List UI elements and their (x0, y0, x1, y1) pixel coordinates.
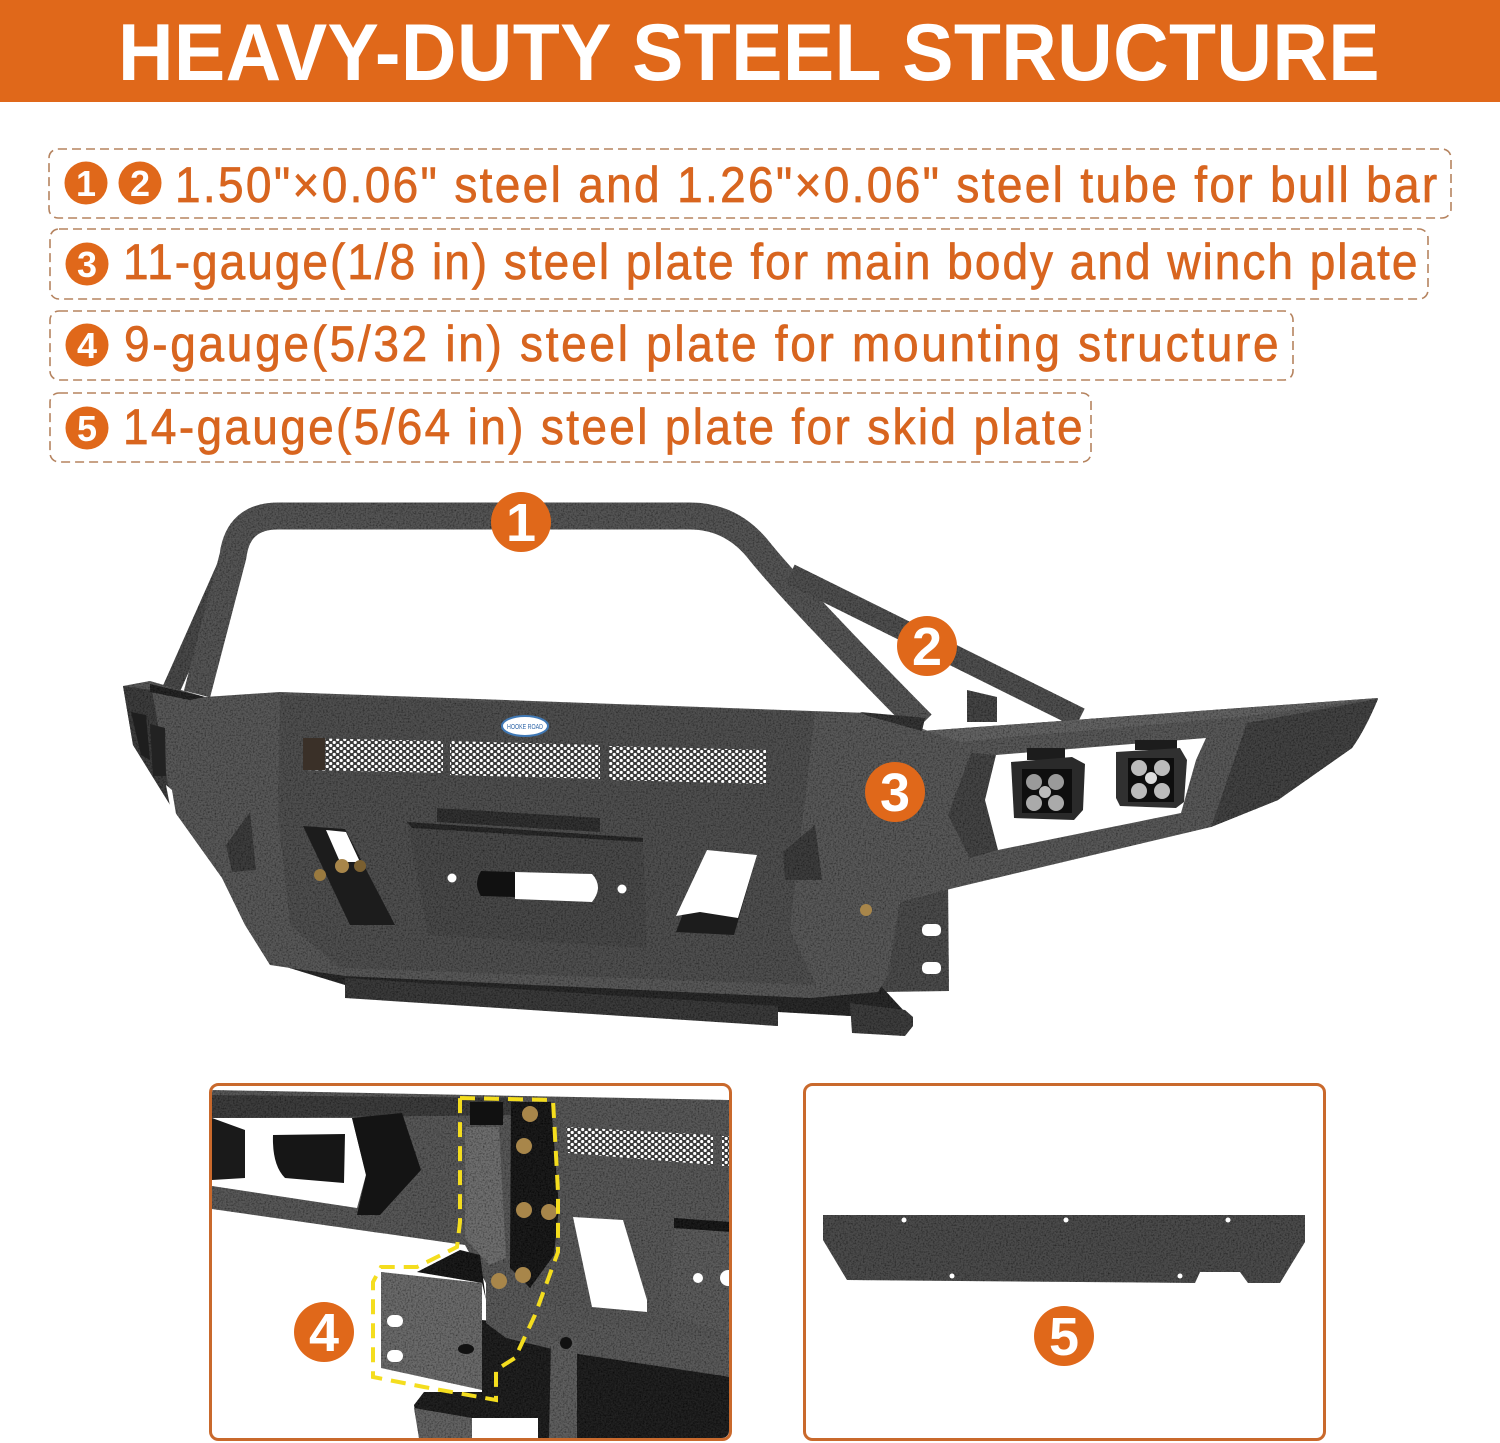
cross beam (486, 1320, 729, 1377)
left end panel (123, 686, 172, 808)
white window openings (212, 1118, 366, 1208)
bolts (491, 1106, 557, 1289)
vertical strut (549, 1348, 577, 1438)
callout 1: 1 (506, 493, 536, 553)
center panel (278, 695, 816, 985)
callout 4: 4 (309, 1303, 339, 1363)
wing end panel (1211, 699, 1378, 827)
title: HEAVY-DUTY STEEL STRUCTURE (118, 6, 1380, 97)
left tower openings (131, 712, 150, 760)
upper beam and body (212, 1090, 730, 1350)
yellow dashed highlight (373, 1098, 558, 1400)
LED light right (1116, 740, 1187, 808)
mounting tabs (967, 690, 997, 722)
left opening with bolts (303, 826, 395, 925)
black box (470, 1102, 503, 1125)
bumper main body (123, 681, 1378, 998)
upper wing highlight (880, 698, 1378, 742)
winch plate (671, 1218, 730, 1335)
spec row: skid plate: 5 (77, 408, 97, 449)
panel: mounting structure detail (210, 1084, 736, 1440)
detail mesh (566, 1127, 713, 1165)
spec row: mounting structure: 4 (77, 325, 97, 366)
hex mesh grilles (303, 738, 443, 773)
lower right dark area (414, 1320, 730, 1438)
LED light left (1011, 748, 1085, 820)
spec row: bull bar tubes: 2 (130, 163, 150, 204)
skid foot (414, 1408, 472, 1438)
callout 5 (1034, 1306, 1094, 1367)
gray column (465, 1127, 506, 1265)
callout 4 (294, 1302, 354, 1363)
skid plate under bumper (345, 978, 778, 1026)
logo badge: HOOKE ROAD (507, 722, 543, 731)
top rail (212, 1095, 520, 1118)
top plates (150, 684, 205, 700)
black bolt strip (510, 1102, 559, 1288)
right opening (676, 850, 757, 935)
dark arm behind bracket (417, 1250, 486, 1300)
bull bar tubes (170, 516, 1080, 724)
skid plate (823, 1215, 1305, 1283)
bracket holes (387, 1270, 736, 1362)
callout 3: 3 (880, 763, 910, 823)
spec row: skid plate: 14-gauge(5/64 in) steel plate for skid plate (123, 400, 1083, 455)
callout 1 (491, 492, 551, 553)
lower bracket (381, 1272, 482, 1390)
spec row: main body plate: 3 (77, 244, 97, 285)
winch plate (407, 822, 647, 948)
logo badge (502, 716, 548, 736)
callout 5: 5 (1049, 1307, 1079, 1367)
callout 2 (897, 616, 957, 677)
callout 3 (865, 762, 925, 823)
spec row: main body plate: 11-gauge(1/8 in) steel plate for main body and winch plate (123, 235, 1417, 290)
white light window (985, 738, 1206, 850)
panel: skid plate detail (804, 1084, 1324, 1440)
callout 2: 2 (912, 617, 942, 677)
under-body strip (270, 962, 905, 1016)
spec row: mounting structure: 9-gauge(5/32 in) steel plate for mounting structure (124, 317, 1279, 372)
bracket slots (860, 904, 941, 974)
rear mounting bracket (880, 880, 949, 992)
winch slot and holes (448, 871, 626, 902)
bumper illustration (123, 492, 1378, 1036)
window side facet (948, 753, 998, 858)
header banner (0, 0, 1500, 102)
panel frame (210, 1084, 730, 1440)
spec row: bull bar tubes: 1 (76, 163, 96, 204)
lights (212, 1118, 245, 1180)
spec row: bull bar tubes: 1.50"×0.06" steel and 1.26"×0.06" steel tube for bull bar (175, 158, 1437, 213)
tow hooks (226, 812, 256, 872)
